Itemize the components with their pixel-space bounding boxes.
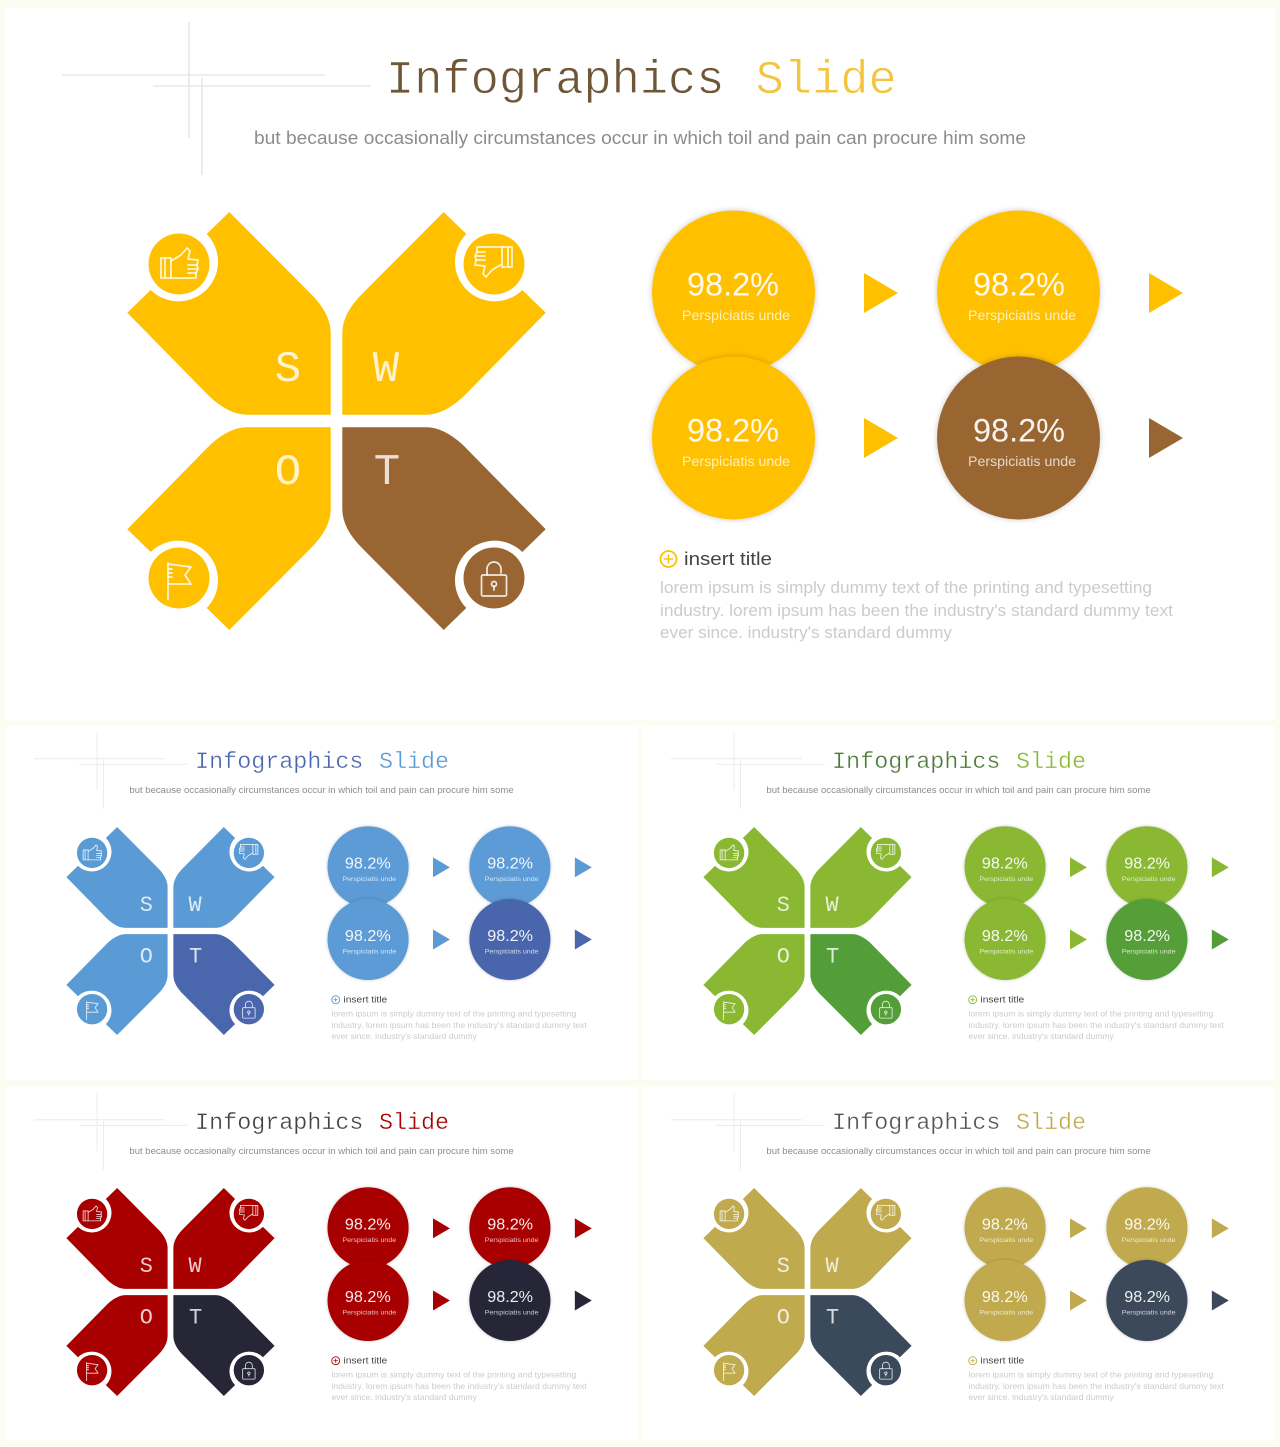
stat: circle 3: Perspiciatis unde xyxy=(342,948,396,955)
petal: T threats: T xyxy=(189,1305,202,1330)
petal: W weaknesses xyxy=(173,1188,275,1289)
stat: circle 2: 98.2% xyxy=(487,856,533,873)
stat: circle 1: 98.2% xyxy=(345,1217,391,1234)
petal: W weaknesses xyxy=(810,1188,912,1289)
body text: ever since. industry's standard dummy xyxy=(968,1392,1115,1402)
stat: circle 3: Perspiciatis unde xyxy=(979,1309,1033,1316)
petal: W weaknesses xyxy=(342,212,546,415)
body text: lorem ipsum is simply dummy text of the printing and typesetting xyxy=(968,1009,1214,1019)
stat: circle 3: Perspiciatis unde xyxy=(979,948,1033,955)
stat: circle 1: 98.2% xyxy=(345,856,391,873)
SWOT diagram xyxy=(127,212,546,630)
insert title heading: insert title xyxy=(684,548,772,569)
stat: circle 3: 98.2% xyxy=(982,928,1028,945)
petal: W weaknesses: W xyxy=(373,345,400,395)
arrow 4 xyxy=(1212,1291,1229,1310)
stat: circle 3 xyxy=(965,1260,1046,1341)
stat: circle 1: 98.2% xyxy=(982,1217,1028,1234)
arrow 3 xyxy=(1070,930,1087,949)
stat: circle 3: 98.2% xyxy=(687,412,779,448)
stat: circle 1: 98.2% xyxy=(687,266,779,302)
icon: flag xyxy=(724,1002,735,1020)
arrow 3 xyxy=(433,930,450,949)
arrow 3 xyxy=(1070,1291,1087,1310)
SWOT diagram xyxy=(66,1188,275,1396)
panel: yellow slide xyxy=(5,8,1275,720)
panel: blue slide xyxy=(5,725,638,1080)
petal: O opportunities xyxy=(703,1295,805,1396)
petal: S strengths: S xyxy=(777,893,790,918)
subtitle: but because occasionally circumstances occur in which toil and pain can procure him some xyxy=(129,1146,514,1156)
arrow 1 xyxy=(864,273,898,313)
icon: thumbs down xyxy=(475,247,512,277)
stat: circle 2: Perspiciatis unde xyxy=(485,1237,539,1244)
stat: circle 1 xyxy=(965,826,1046,907)
icon: plus bullet xyxy=(332,1357,340,1365)
body text: industry. lorem ipsum has been the industry's standard dummy text xyxy=(331,1381,587,1391)
stat: circle 3 xyxy=(328,1260,409,1341)
stat: circle 1 xyxy=(328,826,409,907)
petal: T threats xyxy=(810,1295,912,1396)
stat: circle 4: 98.2% xyxy=(1124,1289,1170,1306)
stat: circle 4 xyxy=(469,1260,550,1341)
petal: T threats: T xyxy=(189,944,202,969)
petal: S strengths: S xyxy=(140,1254,153,1279)
stat: circle 1 xyxy=(965,1187,1046,1268)
panel: olive slide xyxy=(642,1086,1275,1441)
petal: O opportunities xyxy=(703,934,805,1035)
petal: T threats: T xyxy=(826,1305,839,1330)
petal: S strengths xyxy=(127,212,331,415)
body text: ever since. industry's standard dummy xyxy=(660,623,953,642)
petal: W weaknesses: W xyxy=(189,1254,203,1279)
petal: O opportunities xyxy=(66,1295,168,1396)
icon: thumbs down xyxy=(876,844,895,859)
insert title heading: insert title xyxy=(980,995,1024,1005)
icon: thumbs up xyxy=(720,845,739,860)
arrow 2 xyxy=(1212,857,1229,877)
stat: circle 3 xyxy=(328,899,409,980)
stat: circle 4: 98.2% xyxy=(973,412,1065,448)
icon: open lock xyxy=(880,1001,892,1018)
body text: lorem ipsum is simply dummy text of the printing and typesetting xyxy=(331,1009,577,1019)
arrow 3 xyxy=(864,418,898,458)
arrow 4 xyxy=(1149,418,1183,458)
icon: thumbs down xyxy=(239,844,258,859)
petal: T threats xyxy=(342,427,546,630)
stat: circle 4 xyxy=(1106,899,1187,980)
icon: open lock xyxy=(482,562,506,596)
stat: circle 4: Perspiciatis unde xyxy=(485,1309,539,1316)
petal: T threats: T xyxy=(826,944,839,969)
stat: circle 1: Perspiciatis unde xyxy=(682,308,790,323)
subtitle: but because occasionally circumstances occur in which toil and pain can procure him some xyxy=(129,785,514,795)
icon: thumbs up xyxy=(83,1206,102,1221)
body text: lorem ipsum is simply dummy text of the printing and typesetting xyxy=(331,1370,577,1380)
insert title heading: insert title xyxy=(343,995,387,1005)
insert title heading: insert title xyxy=(980,1356,1024,1366)
stat: circle 4 xyxy=(469,899,550,980)
petal: O opportunities: O xyxy=(140,1305,153,1330)
icon: open lock xyxy=(243,1001,255,1018)
icon: plus bullet xyxy=(969,1357,977,1365)
stat: circle 4: 98.2% xyxy=(487,1289,533,1306)
stat: circle 3: Perspiciatis unde xyxy=(682,454,790,469)
icon: thumbs up xyxy=(720,1206,739,1221)
icon: thumbs up xyxy=(83,845,102,860)
body text: lorem ipsum is simply dummy text of the printing and typesetting xyxy=(660,578,1152,597)
arrow 1 xyxy=(1070,1218,1087,1238)
petal: S strengths: S xyxy=(140,893,153,918)
petal: S strengths xyxy=(66,1188,168,1289)
stat: circle 4 xyxy=(937,356,1100,520)
stat: circle 2: 98.2% xyxy=(1124,1217,1170,1234)
body text: industry. lorem ipsum has been the industry's standard dummy text xyxy=(968,1020,1224,1030)
title: Infographics Slide xyxy=(832,750,1086,776)
petal: T threats xyxy=(173,934,275,1035)
icon: plus bullet xyxy=(660,551,676,567)
arrow 1 xyxy=(1070,857,1087,877)
arrow 1 xyxy=(433,1218,450,1238)
title: Infographics Slide xyxy=(386,55,897,108)
icon: flag xyxy=(724,1363,735,1381)
stat: circle 4: Perspiciatis unde xyxy=(968,454,1076,469)
icon: thumbs up xyxy=(161,248,198,278)
stat: circle 4: 98.2% xyxy=(1124,928,1170,945)
SWOT diagram xyxy=(703,1188,912,1396)
petal: O opportunities: O xyxy=(777,944,790,969)
stat: circle 2: Perspiciatis unde xyxy=(1122,876,1176,883)
body text: ever since. industry's standard dummy xyxy=(331,1392,478,1402)
stat: circle 4: Perspiciatis unde xyxy=(485,948,539,955)
stat: circle 2: Perspiciatis unde xyxy=(968,308,1076,323)
arrow 2 xyxy=(1212,1218,1229,1238)
petal: W weaknesses xyxy=(810,827,912,928)
stat: circle 2 xyxy=(937,210,1100,374)
petal: W weaknesses: W xyxy=(826,893,840,918)
stat: circle 1: Perspiciatis unde xyxy=(342,876,396,883)
petal: W weaknesses: W xyxy=(826,1254,840,1279)
stat: circle 4: 98.2% xyxy=(487,928,533,945)
icon: flag xyxy=(87,1363,98,1381)
petal: O opportunities: O xyxy=(777,1305,790,1330)
stat: circle 3 xyxy=(652,356,815,520)
stat: circle 4 xyxy=(1106,1260,1187,1341)
petal: O opportunities xyxy=(66,934,168,1035)
stat: circle 2: 98.2% xyxy=(1124,856,1170,873)
petal: W weaknesses xyxy=(173,827,275,928)
stat: circle 3: Perspiciatis unde xyxy=(342,1309,396,1316)
SWOT diagram xyxy=(66,827,275,1035)
subtitle: but because occasionally circumstances occur in which toil and pain can procure him some xyxy=(254,127,1026,148)
stat: circle 4: Perspiciatis unde xyxy=(1122,1309,1176,1316)
body text: ever since. industry's standard dummy xyxy=(331,1031,478,1041)
stat: circle 1 xyxy=(652,210,815,374)
arrow 4 xyxy=(575,930,592,949)
stat: circle 3 xyxy=(965,899,1046,980)
stat: circle 1: Perspiciatis unde xyxy=(979,876,1033,883)
petal: T threats xyxy=(173,1295,275,1396)
petal: O opportunities xyxy=(127,427,331,630)
stat: circle 2 xyxy=(1106,826,1187,907)
icon: flag xyxy=(168,563,191,599)
petal: W weaknesses: W xyxy=(189,893,203,918)
stat: circle 2: Perspiciatis unde xyxy=(1122,1237,1176,1244)
stat: circle 1: Perspiciatis unde xyxy=(979,1237,1033,1244)
petal: S strengths xyxy=(703,1188,805,1289)
stat: circle 1: 98.2% xyxy=(982,856,1028,873)
icon: thumbs down xyxy=(876,1205,895,1220)
panel: red slide xyxy=(5,1086,638,1441)
icon: thumbs down xyxy=(239,1205,258,1220)
stat: circle 2: 98.2% xyxy=(487,1217,533,1234)
title: Infographics Slide xyxy=(195,1111,449,1137)
stat: circle 2: Perspiciatis unde xyxy=(485,876,539,883)
icon: open lock xyxy=(243,1362,255,1379)
arrow 1 xyxy=(433,857,450,877)
stat: circle 1: Perspiciatis unde xyxy=(342,1237,396,1244)
petal: T threats: T xyxy=(374,448,400,498)
arrow 2 xyxy=(575,857,592,877)
petal: S strengths xyxy=(66,827,168,928)
arrow 2 xyxy=(1149,273,1183,313)
arrow 2 xyxy=(575,1218,592,1238)
body text: industry. lorem ipsum has been the industry's standard dummy text xyxy=(331,1020,587,1030)
stat: circle 2: 98.2% xyxy=(973,266,1065,302)
stat: circle 3: 98.2% xyxy=(345,928,391,945)
stat: circle 2 xyxy=(469,1187,550,1268)
body text: lorem ipsum is simply dummy text of the printing and typesetting xyxy=(968,1370,1214,1380)
stat: circle 2 xyxy=(469,826,550,907)
arrow 3 xyxy=(433,1291,450,1310)
stat: circle 3: 98.2% xyxy=(345,1289,391,1306)
arrow 4 xyxy=(575,1291,592,1310)
petal: O opportunities: O xyxy=(275,448,301,498)
stat: circle 2 xyxy=(1106,1187,1187,1268)
petal: O opportunities: O xyxy=(140,944,153,969)
stat: circle 1 xyxy=(328,1187,409,1268)
stat: circle 3: 98.2% xyxy=(982,1289,1028,1306)
insert title heading: insert title xyxy=(343,1356,387,1366)
SWOT diagram xyxy=(703,827,912,1035)
arrow 4 xyxy=(1212,930,1229,949)
panel: green slide xyxy=(642,725,1275,1080)
icon: open lock xyxy=(880,1362,892,1379)
subtitle: but because occasionally circumstances occur in which toil and pain can procure him some xyxy=(766,1146,1151,1156)
body text: ever since. industry's standard dummy xyxy=(968,1031,1115,1041)
petal: S strengths xyxy=(703,827,805,928)
petal: S strengths: S xyxy=(777,1254,790,1279)
stat: circle 4: Perspiciatis unde xyxy=(1122,948,1176,955)
icon: plus bullet xyxy=(332,996,340,1004)
petal: T threats xyxy=(810,934,912,1035)
body text: industry. lorem ipsum has been the industry's standard dummy text xyxy=(660,601,1173,620)
subtitle: but because occasionally circumstances occur in which toil and pain can procure him some xyxy=(766,785,1151,795)
body text: industry. lorem ipsum has been the industry's standard dummy text xyxy=(968,1381,1224,1391)
icon: plus bullet xyxy=(969,996,977,1004)
title: Infographics Slide xyxy=(832,1111,1086,1137)
petal: S strengths: S xyxy=(275,345,301,395)
icon: flag xyxy=(87,1002,98,1020)
title: Infographics Slide xyxy=(195,750,449,776)
